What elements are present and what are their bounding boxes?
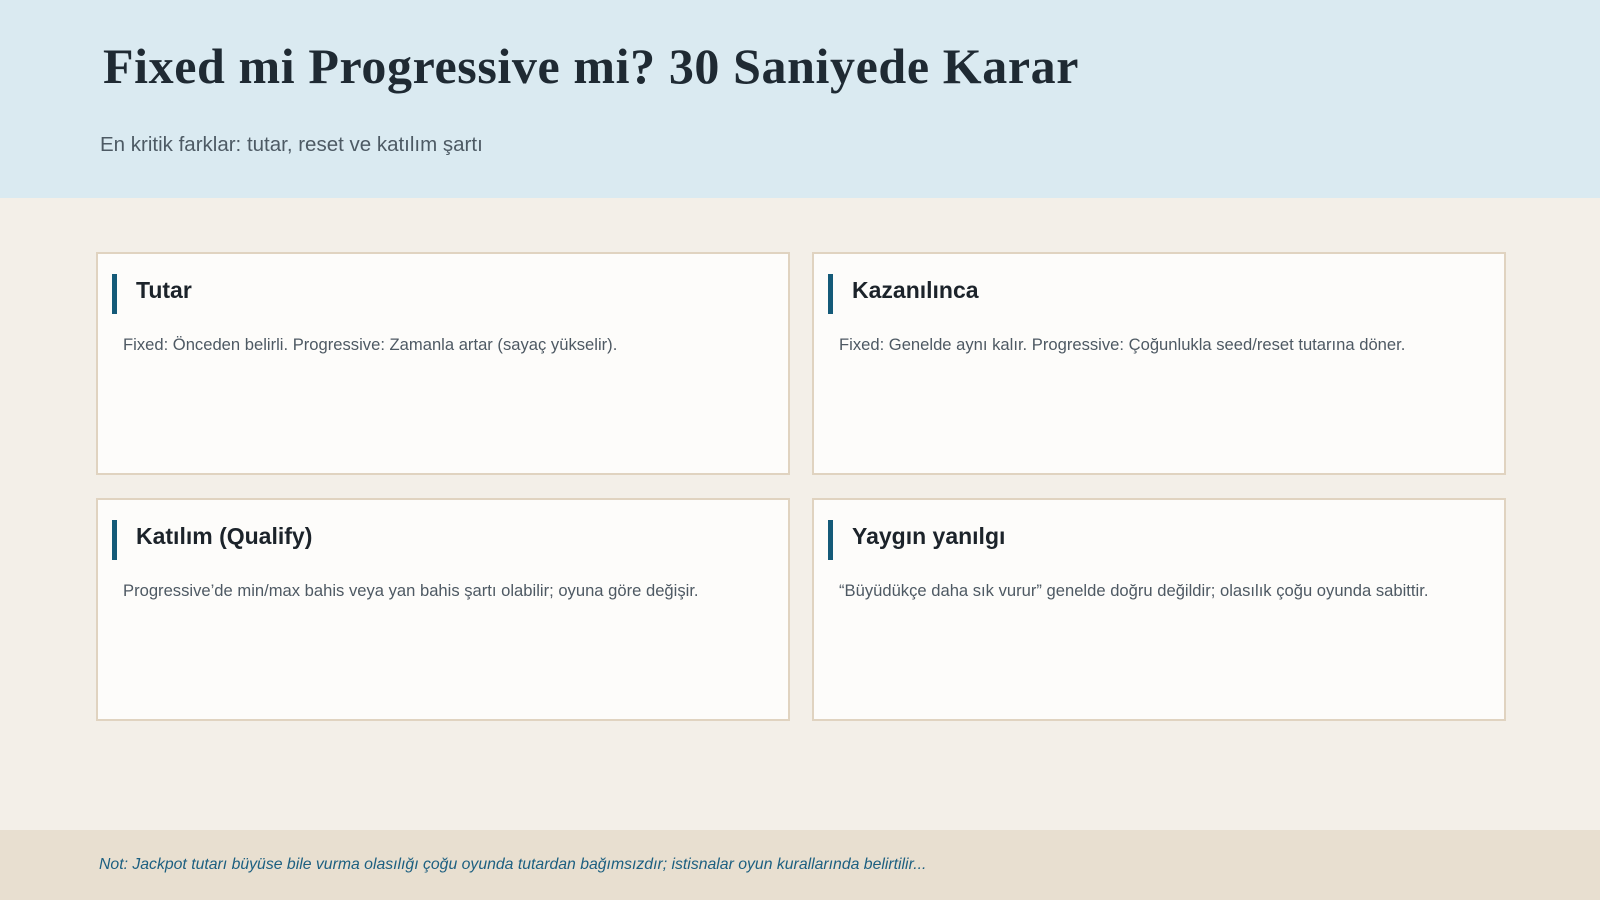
footer note: Not: Jackpot tutarı büyüse bile vurma olasılığı çoğu oyunda tutardan bağımsızdır; istisnalar oyun kurallarında belirtilir... xyxy=(99,856,926,873)
subtitle: En kritik farklar: tutar, reset ve katılım şartı xyxy=(100,133,483,156)
header band xyxy=(0,0,1600,198)
panel: yaygın yanılgı xyxy=(812,498,1506,721)
panel: yaygın yanılgı: “Büyüdükçe daha sık vurur” genelde doğru değildir; olasılık çoğu oyunda sabittir. xyxy=(839,581,1428,600)
panel: kazanılınca xyxy=(812,252,1506,475)
footer note xyxy=(0,830,1600,900)
panel: yaygın yanılgı: Yaygın yanılgı xyxy=(852,523,1005,549)
panel: katılım: Katılım (Qualify) xyxy=(136,523,312,549)
panel: tutar: Tutar xyxy=(136,277,192,303)
panel: tutar xyxy=(96,252,790,475)
title: Fixed mi Progressive mi? 30 Saniyede Karar xyxy=(103,38,1079,94)
panel: katılım xyxy=(96,498,790,721)
panel: kazanılınca: Kazanılınca xyxy=(852,277,979,303)
panel: kazanılınca: Fixed: Genelde aynı kalır. Progressive: Çoğunlukla seed/reset tutarına döner. xyxy=(839,335,1405,354)
panel: tutar: Fixed: Önceden belirli. Progressive: Zamanla artar (sayaç yükselir). xyxy=(123,335,617,354)
panel: katılım: Progressive’de min/max bahis veya yan bahis şartı olabilir; oyuna göre değişir. xyxy=(123,581,699,600)
